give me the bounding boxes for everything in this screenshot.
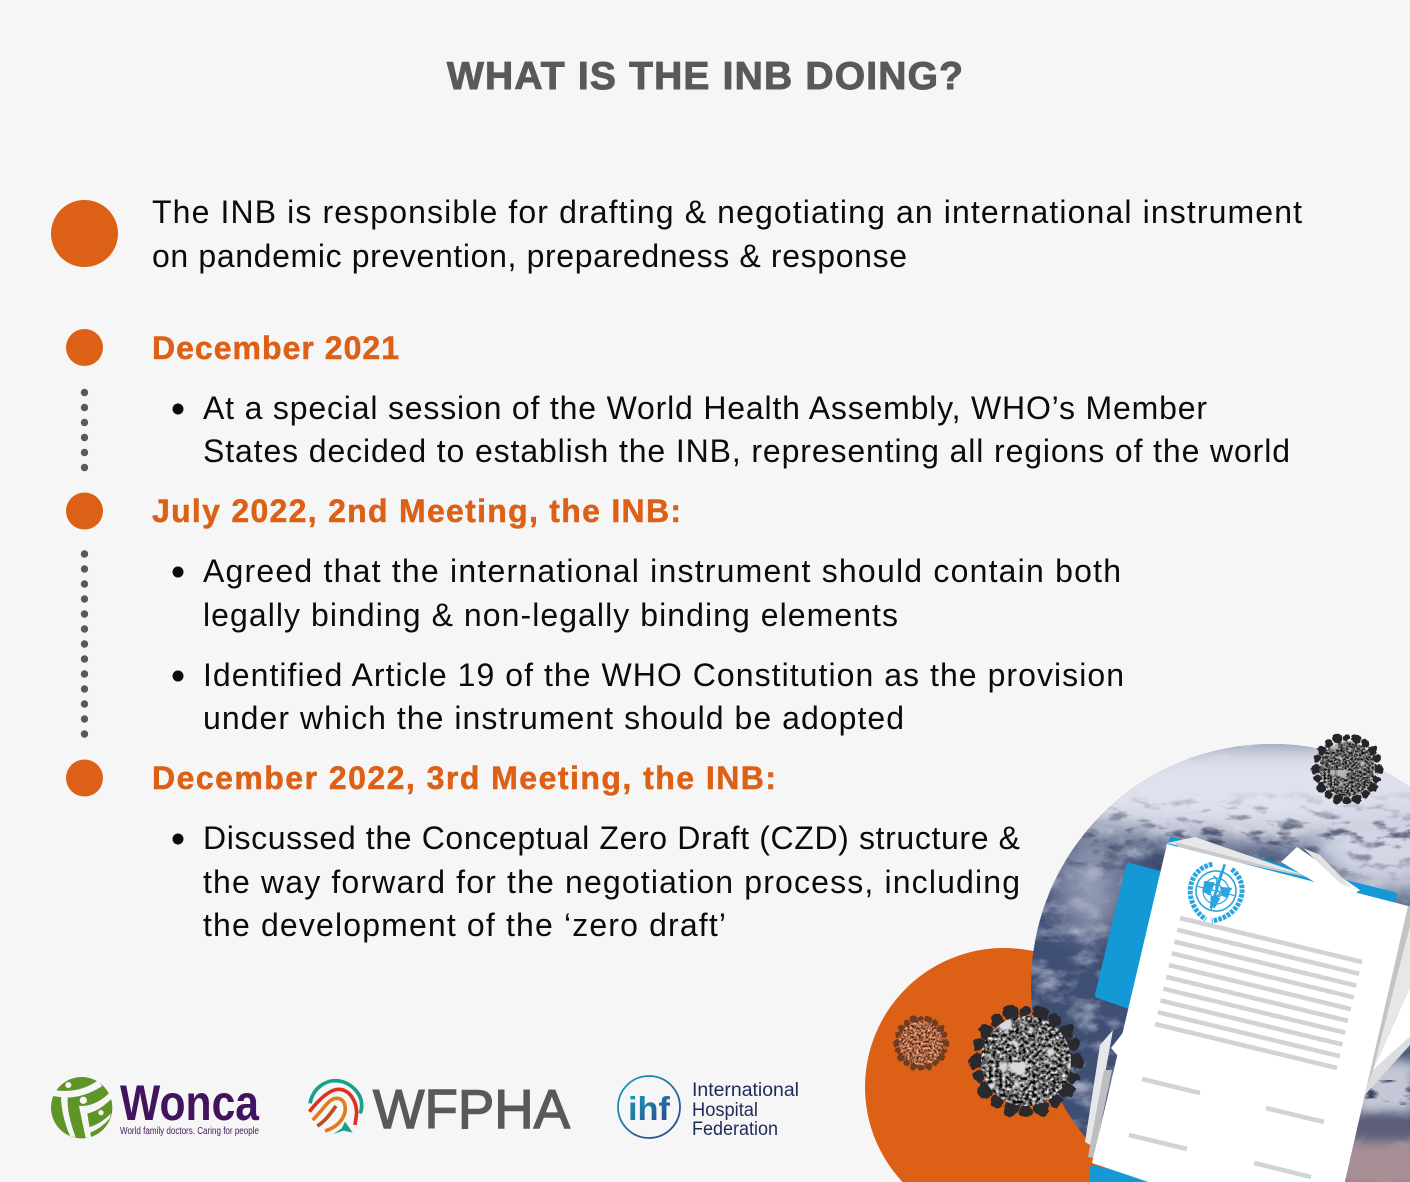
icon: top virus — [1310, 733, 1384, 805]
heading: December 2021: December 2021 — [152, 330, 399, 366]
intro text — [152, 194, 1302, 274]
intro bullet circle — [51, 200, 118, 267]
illustration: main document — [1092, 844, 1408, 1182]
logo: International Hospital Federation: Hospital — [692, 1100, 758, 1121]
bullet text: Conceptual Zero Draft: the way forward for the negotiation process, including — [203, 864, 1020, 900]
logo: Wonca: World family doctors. Caring for people — [120, 1126, 259, 1137]
icon: WHO emblem — [1184, 858, 1248, 926]
bullet text: legally binding elements: Agreed that the international instrument should contain both — [203, 553, 1121, 589]
illustration: blue folder — [1093, 840, 1394, 1182]
logo: International Hospital Federation: International — [692, 1080, 799, 1101]
timeline marker: December 2022 — [66, 760, 103, 796]
Wonca globe mark — [51, 1077, 112, 1138]
document text lines — [1129, 918, 1362, 1177]
timeline marker: December 2021 — [66, 329, 103, 366]
icon: brown virus — [893, 1015, 949, 1071]
timeline dotted connector 2 — [81, 550, 88, 738]
bullet text: Article 19: under which the instrument should be adopted — [203, 700, 904, 736]
illustration: orange circle — [865, 948, 1143, 1182]
heading: July 2022: July 2022, 2nd Meeting, the INB: — [152, 493, 681, 529]
logo: Wonca: Wonca — [120, 1075, 260, 1131]
bullet text: World Health Assembly — [172, 390, 1290, 469]
illustration: earth globe — [1015, 735, 1410, 1182]
logo: International Hospital Federation: ihf — [628, 1090, 671, 1127]
intro text: The INB is responsible for drafting & negotiating an international instrument — [152, 194, 1302, 230]
bullet text: Article 19 — [172, 657, 1124, 736]
bullet text: Conceptual Zero Draft: Discussed the Conceptual Zero Draft (CZD) structure & — [203, 820, 1020, 856]
icon: large virus — [968, 1004, 1084, 1118]
bullet text: Conceptual Zero Draft: the development of the ‘zero draft’ — [203, 907, 726, 943]
heading: December 2022: December 2022, 3rd Meeting, the INB: — [152, 760, 776, 796]
logo: International Hospital Federation: Federation — [692, 1119, 778, 1140]
illustration: back sheets — [1085, 837, 1410, 1158]
bullet text: World Health Assembly: States decided to establish the INB, representing all regions of the world — [203, 433, 1290, 469]
logo: WFPHA: WFPHA — [373, 1078, 570, 1140]
bullet text: Article 19: Identified Article 19 of the WHO Constitution as the provision — [203, 657, 1124, 693]
logo: International Hospital Federation — [618, 1076, 799, 1140]
WFPHA fingerprint mark — [309, 1081, 362, 1134]
timeline marker: July 2022 — [66, 492, 103, 530]
bullet text: legally binding elements — [172, 553, 1121, 633]
bullet text: legally binding elements: legally binding & non-legally binding elements — [203, 597, 898, 633]
bullet text: World Health Assembly: At a special session of the World Health Assembly, WHO’s Member — [203, 390, 1207, 426]
bullet text: Conceptual Zero Draft — [172, 820, 1020, 943]
logo: Wonca — [51, 1075, 260, 1138]
intro text: on pandemic prevention, preparedness & response — [152, 238, 907, 274]
title: WHAT IS THE INB DOING? — [447, 55, 963, 98]
timeline dotted connector 1 — [81, 389, 88, 471]
